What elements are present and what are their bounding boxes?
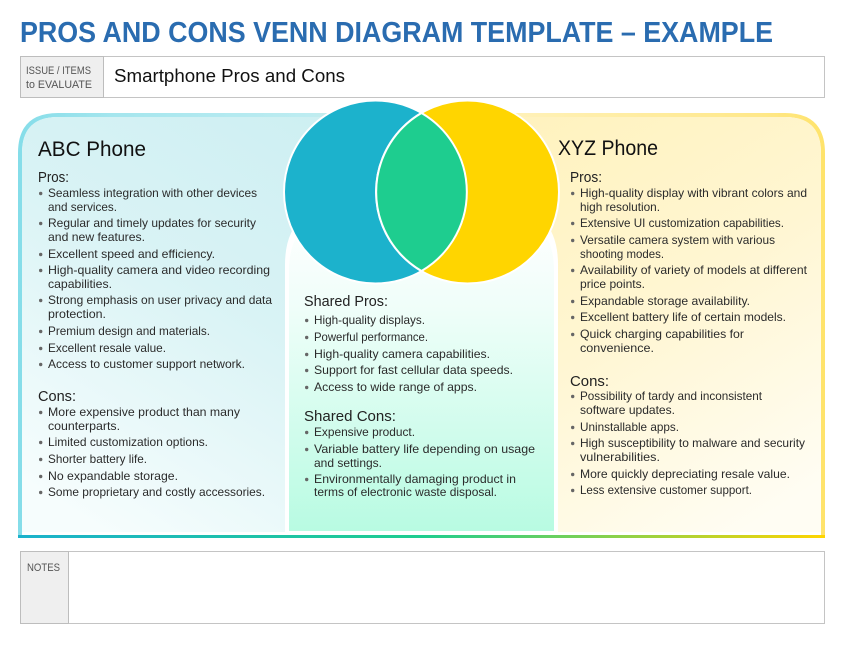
ABC cons: [38, 389, 265, 499]
issue label cell: to EVALUATE: [26, 79, 92, 91]
shared pros: High-quality camera capabilities.: [314, 348, 490, 361]
ABC pros: Regular and timely updates for security: [48, 217, 256, 230]
XYZ pros: Expandable storage availability.: [580, 295, 750, 308]
shared pros: Shared Pros:: [304, 294, 388, 310]
panel: shared: [304, 294, 535, 499]
left panel fill: [22, 117, 421, 532]
ABC pros: protection.: [48, 308, 106, 321]
ABC pros: [38, 170, 272, 371]
shared cons: Expensive product.: [314, 426, 415, 439]
XYZ pros: Pros:: [570, 170, 602, 186]
ABC cons: More expensive product than many: [48, 406, 240, 419]
ABC cons: counterparts.: [48, 420, 120, 433]
shared pros: Access to wide range of apps.: [314, 381, 477, 394]
venn panel background: [18, 113, 825, 538]
XYZ cons: High susceptibility to malware and security: [580, 437, 805, 450]
XYZ cons: Less extensive customer support.: [580, 484, 752, 497]
shared pros: Powerful performance.: [314, 331, 428, 344]
notes box: [20, 552, 824, 624]
heading: ABC Phone: ABC Phone: [38, 138, 146, 161]
center panel fill: [289, 215, 554, 531]
heading: XYZ Phone: XYZ Phone: [558, 137, 658, 160]
issue label cell: ISSUE / ITEMS: [26, 65, 91, 77]
XYZ pros: Versatile camera system with various: [580, 234, 775, 247]
XYZ pros: price points.: [580, 278, 645, 291]
ABC cons: Some proprietary and costly accessories.: [48, 486, 265, 499]
shared cons: Environmentally damaging product in: [314, 473, 516, 486]
issue header row: [20, 56, 824, 98]
XYZ cons: Cons:: [570, 374, 609, 390]
XYZ pros: high resolution.: [580, 201, 660, 214]
panel: ABC Phone: [38, 138, 272, 499]
shared cons: terms of electronic waste disposal.: [314, 486, 497, 499]
shared cons: and settings.: [314, 457, 382, 470]
ABC cons: No expandable storage.: [48, 470, 178, 483]
ABC pros: Pros:: [38, 170, 69, 186]
XYZ pros: Excellent battery life of certain models.: [580, 311, 786, 324]
XYZ pros: Extensive UI customization capabilities.: [580, 217, 784, 230]
ABC pros: High-quality camera and video recording: [48, 264, 270, 277]
XYZ pros: [570, 170, 808, 355]
right panel fill: [421, 117, 821, 532]
ABC cons: Cons:: [38, 389, 76, 405]
shared pros: Support for fast cellular data speeds.: [314, 364, 513, 377]
shared cons: Shared Cons:: [304, 409, 396, 425]
XYZ pros: Quick charging capabilities for: [580, 328, 744, 341]
issue label cell: [20, 56, 104, 98]
shared cons: Variable battery life depending on usage: [314, 443, 535, 456]
XYZ cons: Uninstallable apps.: [580, 421, 679, 434]
notes label cell: NOTES: [27, 562, 60, 574]
shared pros: High-quality displays.: [314, 314, 425, 327]
XYZ cons: software updates.: [580, 404, 675, 417]
ABC cons: Limited customization options.: [48, 436, 208, 449]
shared pros: [304, 294, 513, 394]
XYZ pros: shooting modes.: [580, 248, 664, 261]
issue value: Smartphone Pros and Cons: [114, 65, 345, 86]
XYZ pros: convenience.: [580, 342, 654, 355]
venn diagram circles: [284, 100, 559, 284]
XYZ cons: More quickly depreciating resale value.: [580, 468, 790, 481]
XYZ pros: High-quality display with vibrant colors and: [580, 187, 807, 200]
title: PROS AND CONS VENN DIAGRAM TEMPLATE – EXAMPLE: [20, 17, 773, 49]
center arch: [285, 205, 558, 535]
ABC pros: capabilities.: [48, 278, 112, 291]
ABC cons: Shorter battery life.: [48, 453, 147, 466]
ABC pros: Premium design and materials.: [48, 325, 210, 338]
ABC pros: Access to customer support network.: [48, 358, 245, 371]
ABC pros: Strong emphasis on user privacy and data: [48, 294, 272, 307]
XYZ cons: vulnerabilities.: [580, 451, 660, 464]
ABC pros: Seamless integration with other devices: [48, 187, 257, 200]
shared cons: [304, 409, 535, 499]
ABC pros: and services.: [48, 201, 117, 214]
ABC pros: Excellent speed and efficiency.: [48, 248, 215, 261]
ABC pros: and new features.: [48, 231, 145, 244]
XYZ cons: Possibility of tardy and inconsistent: [580, 390, 763, 403]
bottom gradient rule: [18, 535, 825, 538]
ABC pros: Excellent resale value.: [48, 342, 166, 355]
XYZ cons: [570, 374, 805, 497]
notes label cell: [20, 552, 68, 624]
panel: XYZ Phone: [558, 137, 808, 497]
XYZ pros: Availability of variety of models at different: [580, 264, 808, 277]
